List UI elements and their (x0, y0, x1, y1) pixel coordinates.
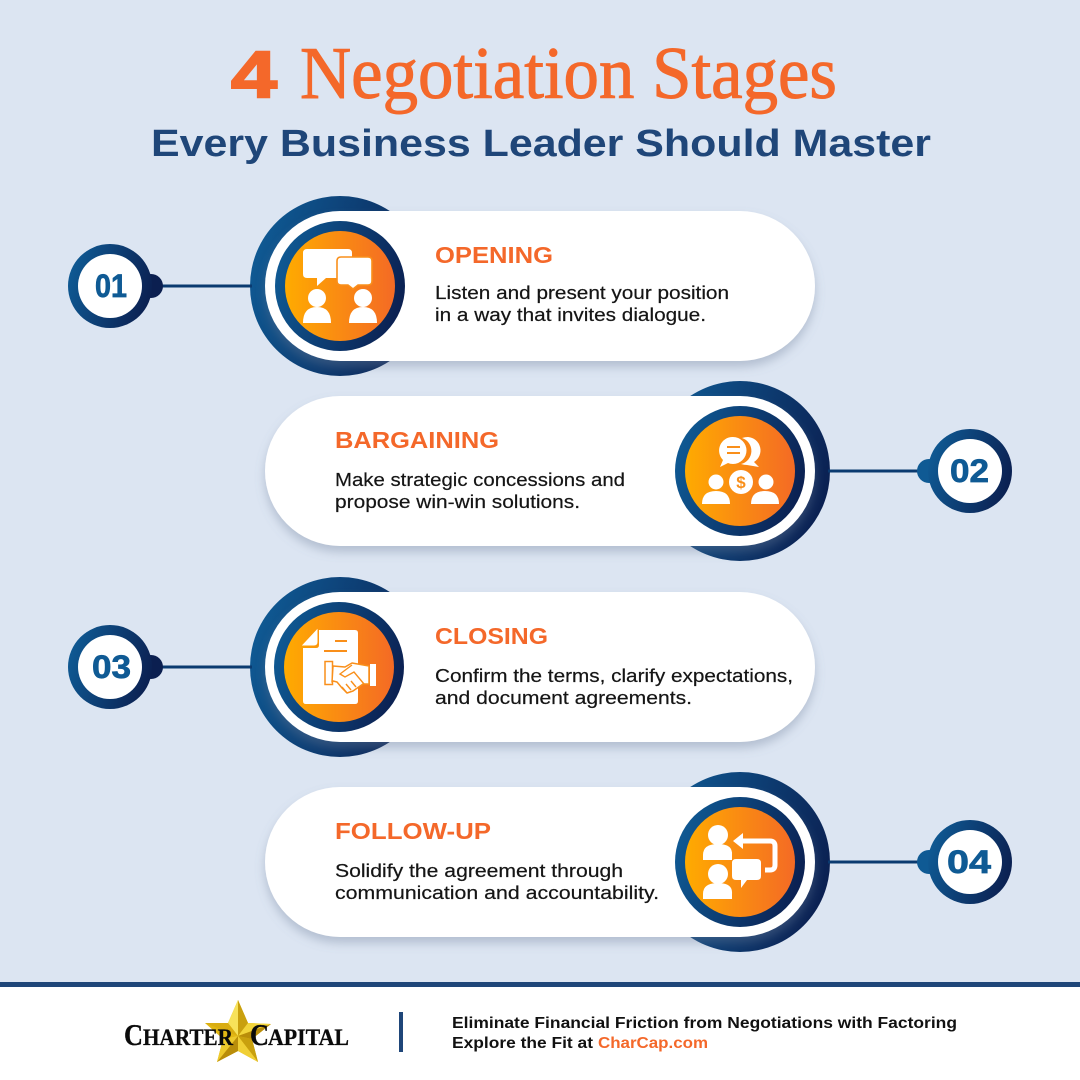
logo: Charter Capital: C (124, 1017, 143, 1052)
text: follow-up: FOLLOW-UP (335, 818, 491, 844)
footer call to action: Eliminate Financial Friction from Negotiations with Factoring (452, 1015, 957, 1032)
icon: bargaining people and coin (675, 406, 805, 536)
icon: follow-up people and return arrow (675, 797, 805, 927)
number badge 01: 01 (95, 268, 127, 304)
text: follow-up: communication and accountability. (335, 883, 659, 903)
card: follow-up (265, 787, 815, 937)
text: follow-up: Solidify the agreement through (335, 861, 623, 881)
number badge 03 (68, 625, 252, 709)
subtitle: Every Business Leader Should Master (151, 123, 931, 165)
footer band (0, 982, 1080, 1080)
text: bargaining: Make strategic concessions and (335, 470, 625, 490)
number badge 02: 02 (950, 453, 989, 489)
icon: bargaining people and coin: $ (736, 473, 746, 492)
footer call to action (452, 1015, 957, 1052)
text: closing: and document agreements. (435, 688, 692, 708)
number badge 01 (68, 244, 252, 328)
text: bargaining: BARGAINING (335, 427, 499, 453)
icon: contract and handshake (274, 602, 404, 732)
icon: two people talking (275, 221, 405, 351)
card: bargaining (265, 396, 815, 546)
footer call to action: Explore the Fit at (452, 1035, 593, 1052)
number badge 03: 03 (92, 649, 131, 685)
text: follow-up (335, 818, 659, 903)
text: bargaining: propose win-win solutions. (335, 492, 580, 512)
text: opening (435, 242, 729, 325)
card: closing (265, 592, 815, 742)
number badge 04: 04 (947, 844, 991, 880)
footer call to action: CharCap.com (598, 1035, 708, 1052)
panel: follow-up (265, 772, 830, 952)
panel: closing (250, 577, 815, 757)
text: closing: CLOSING (435, 623, 548, 649)
text: bargaining (335, 427, 625, 512)
text: opening: OPENING (435, 242, 553, 268)
title: 4 (231, 37, 277, 111)
text: closing: Confirm the terms, clarify expectations, (435, 666, 793, 686)
number badge 02 (828, 429, 1012, 513)
text: closing (435, 623, 793, 708)
card: opening (265, 211, 815, 361)
panel: bargaining (265, 381, 830, 561)
panel: opening (250, 196, 815, 376)
logo: Charter Capital: HARTER (143, 1025, 233, 1050)
text: opening: Listen and present your position (435, 283, 729, 303)
number badge 04 (828, 820, 1012, 904)
title: Negotiation Stages (300, 33, 837, 115)
text: opening: in a way that invites dialogue. (435, 305, 706, 325)
logo: Charter Capital (124, 1000, 349, 1062)
logo: Charter Capital: APITAL (268, 1025, 349, 1050)
logo: Charter Capital: C (250, 1017, 269, 1052)
